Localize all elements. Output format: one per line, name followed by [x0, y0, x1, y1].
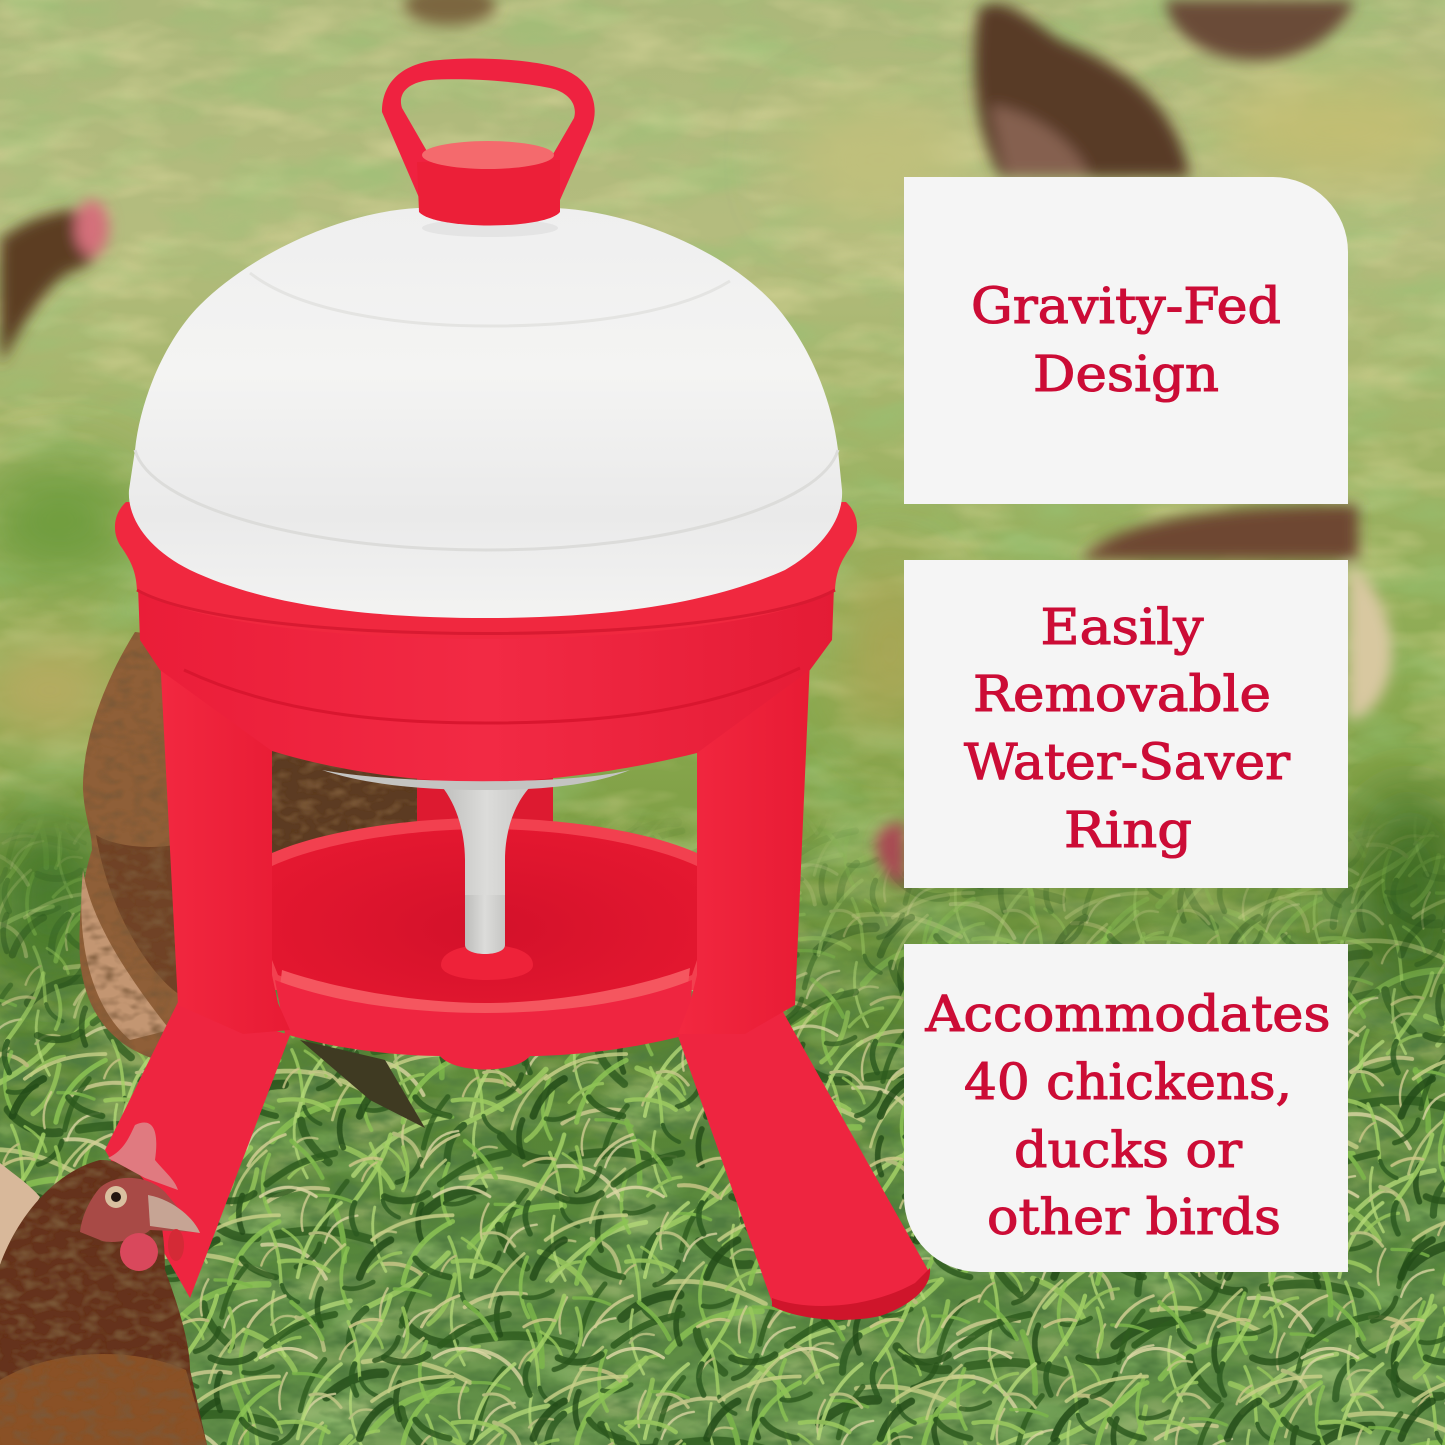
hen body [0, 1160, 207, 1445]
hen: top right [974, 3, 1190, 177]
hen: top centre far [404, 0, 496, 25]
text: removable: Removable [973, 665, 1271, 723]
left foot [105, 1002, 290, 1298]
hen: comb near panel [876, 822, 905, 888]
white dome [129, 208, 842, 618]
heading: design: Design [1033, 345, 1219, 403]
text: water-saver: Water-Saver [964, 733, 1290, 791]
text: other birds: other birds [987, 1188, 1281, 1246]
brown hen behind drinker [80, 632, 417, 1062]
panel background [904, 560, 1348, 888]
panel background [904, 944, 1348, 1272]
body skirt [137, 560, 835, 782]
wattle small [168, 1229, 184, 1261]
pale hen behind [0, 1163, 40, 1265]
text: ducks or: ducks or [1014, 1121, 1242, 1179]
comb [108, 1123, 178, 1190]
product: poultry drinker [105, 58, 930, 1320]
text: accommodates: Accommodates [924, 985, 1330, 1043]
rim shadow [137, 590, 835, 634]
text: ring: Ring [1064, 801, 1192, 859]
beak [148, 1195, 200, 1233]
hen: right behind panels [1080, 505, 1392, 720]
hen breast [0, 1354, 207, 1445]
right leg [678, 660, 810, 1034]
handle [382, 58, 595, 200]
cap [417, 141, 560, 237]
face [80, 1178, 198, 1242]
panel background [904, 177, 1348, 504]
text: 40 chickens: 40 chickens, [964, 1053, 1292, 1111]
rear pillar [417, 775, 553, 835]
rim [115, 502, 857, 639]
blurred hens in the background [0, 0, 1392, 888]
eye [105, 1186, 127, 1208]
panel: capacity [904, 944, 1348, 1272]
hen: top right far [1165, 0, 1355, 60]
hen: left edge [0, 200, 109, 365]
heading: gravity-fed: Gravity-Fed [971, 277, 1281, 335]
spout [438, 782, 535, 980]
left leg [160, 655, 290, 1034]
hen: bottom left foreground [0, 1123, 207, 1445]
water tray [272, 818, 697, 1070]
body shadow curve [184, 668, 800, 723]
panel: gravity-fed design [904, 177, 1348, 504]
panel: water-saver ring [904, 560, 1348, 888]
text: easily: Easily [1040, 598, 1204, 656]
wattle [120, 1233, 158, 1271]
right foot [678, 1003, 930, 1320]
underside of reservoir [322, 770, 630, 790]
hen foot under drinker [300, 1040, 425, 1128]
